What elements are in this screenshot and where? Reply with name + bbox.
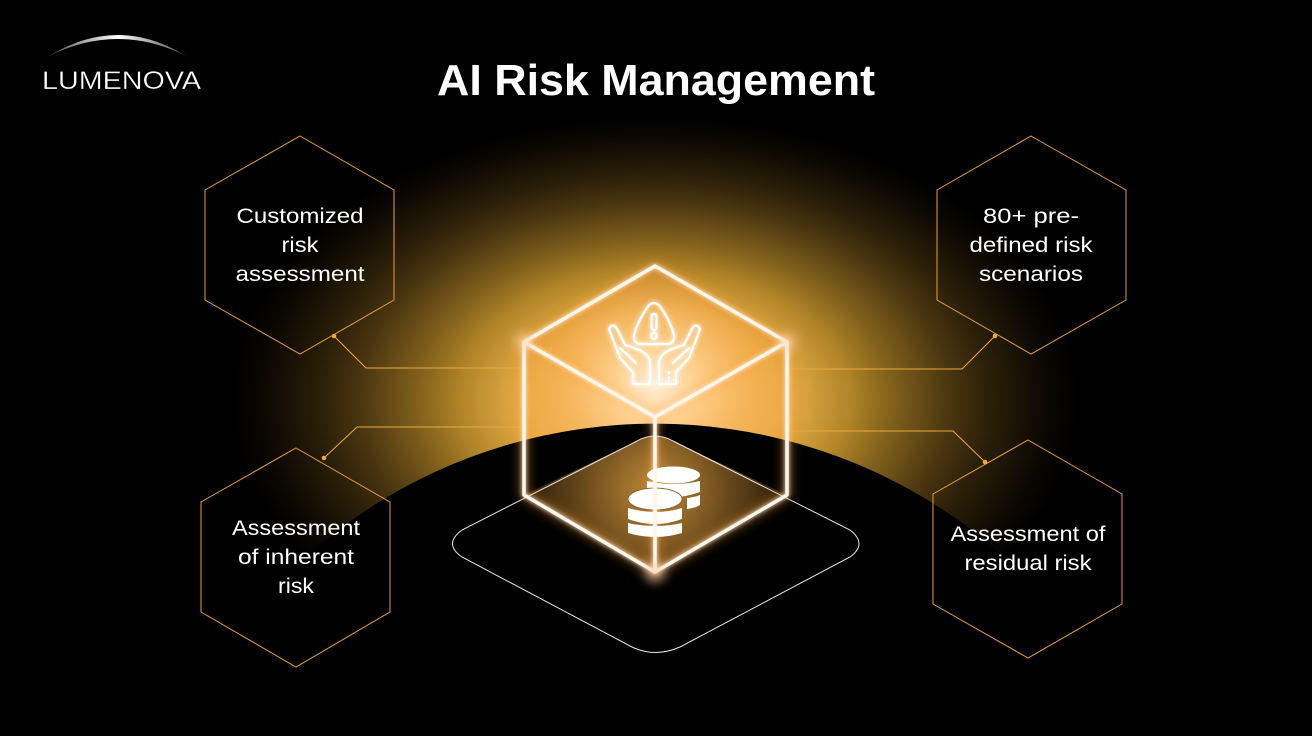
platform — [452, 436, 859, 652]
hexagon: assessment of inherent risk: of inherent — [238, 546, 354, 569]
dark horizon dome — [175, 424, 1135, 736]
cube edge halo — [524, 266, 787, 572]
logo: Lumenova: LUMENOVA — [42, 67, 201, 95]
hexagon: 80+ pre-defined risk scenarios — [937, 136, 1126, 354]
hexagon: 80+ pre-defined risk scenarios: defined risk — [970, 234, 1093, 257]
hexagon: assessment of residual risk: Assessment of — [950, 523, 1106, 546]
cube edges — [524, 266, 787, 572]
hexagon: customized risk assessment: Customized — [236, 205, 364, 228]
cube — [516, 266, 795, 581]
connector: customized risk assessment — [332, 334, 525, 368]
hexagon: customized risk assessment: assessment — [236, 263, 365, 286]
cube floor glow — [524, 436, 787, 572]
hexagon: customized risk assessment: risk — [282, 234, 319, 257]
icon: hands holding warning triangle — [609, 303, 700, 384]
glowing vertices — [516, 334, 795, 581]
hexagon: assessment of inherent risk: risk — [278, 575, 315, 598]
connector: inherent risk — [322, 427, 526, 460]
logo: Lumenova — [42, 35, 201, 95]
database icon: back stack — [647, 466, 700, 509]
title: AI Risk Management — [437, 56, 875, 105]
hexagon: assessment of residual risk — [933, 440, 1122, 658]
hexagon: 80+ pre-defined risk scenarios: 80+ pre- — [983, 205, 1079, 228]
connector: residual risk — [787, 431, 987, 464]
background glow — [230, 115, 1080, 615]
connector: pre-defined risk scenarios — [790, 334, 997, 369]
hexagon: assessment of inherent risk: Assessment — [232, 517, 360, 540]
database icon: front stack — [628, 488, 682, 537]
hexagon: customized risk assessment — [205, 136, 394, 354]
hexagon: assessment of residual risk: residual risk — [964, 552, 1092, 575]
hexagon: assessment of inherent risk — [201, 448, 390, 667]
hexagon: 80+ pre-defined risk scenarios: scenarios — [979, 263, 1083, 286]
